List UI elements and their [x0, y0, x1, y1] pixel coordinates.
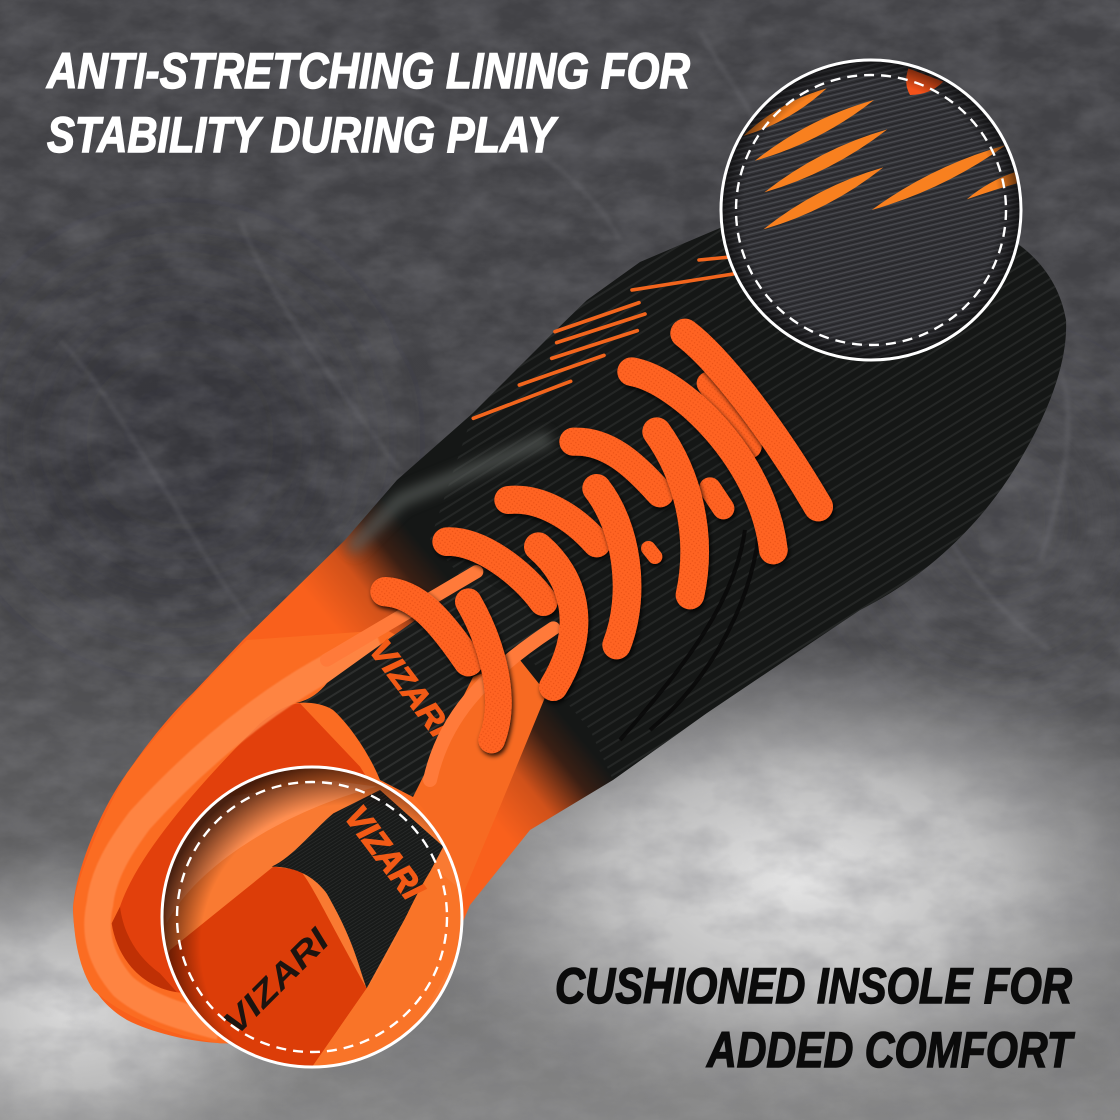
white ring — [721, 60, 1021, 360]
lace row 1 — [685, 333, 818, 507]
upper toe stripes near the callout — [632, 257, 733, 290]
toe rib texture — [430, 228, 1066, 780]
lace row 3 long strand — [657, 432, 695, 595]
shoe upper body — [73, 228, 1066, 1050]
side stitch lines — [620, 520, 760, 740]
heading: anti-stretching lining: ANTI-STRETCHING LINING FOR — [45, 43, 690, 99]
orange slashes — [743, 88, 1017, 229]
right collar band — [310, 867, 465, 1070]
mesh right of the tongue — [413, 660, 547, 893]
callout circle: insole close-up — [160, 763, 467, 1070]
tongue close-up — [272, 790, 443, 988]
collar rim highlight — [98, 643, 380, 1027]
lace row 6 cross strand — [385, 592, 468, 662]
dashed stitch ring — [736, 75, 1006, 345]
lace row 6 long strand — [468, 602, 498, 740]
tongue logo close-up: VIZARI — [337, 799, 431, 907]
shoe — [73, 228, 1066, 1050]
lace row 3 cross strand — [573, 442, 660, 493]
heading: cushioned insole — [555, 958, 1076, 1078]
dashed stitch ring — [177, 782, 447, 1052]
lace row 5 long strand — [538, 547, 574, 687]
callout circle: stretch lining close-up — [720, 58, 1022, 362]
laces — [385, 333, 818, 740]
lace row 4 long strand — [597, 488, 627, 645]
insole logo: VIZARI — [216, 921, 337, 1042]
heel shadow inside opening — [112, 907, 177, 992]
grey sheen along the side — [350, 438, 550, 550]
upper collar fill — [160, 763, 467, 1070]
heading: anti-stretching lining — [45, 43, 690, 163]
heel and collar in orange — [73, 630, 547, 1043]
lace fragments behind — [708, 383, 750, 447]
orange toe stripes — [473, 303, 645, 418]
lace row 5 cross strand — [447, 542, 543, 602]
insole seen inside the opening — [120, 703, 427, 1040]
lace row 2 — [632, 372, 773, 550]
lace tip — [906, 68, 943, 95]
tongue logo: VIZARI — [362, 633, 459, 745]
insole — [160, 867, 367, 1070]
chalk streaks — [60, 30, 1068, 650]
lace row 4 cross strand — [508, 500, 597, 543]
circle edge shade — [164, 768, 440, 1044]
eyelet rims — [327, 572, 553, 780]
collar outer — [73, 630, 480, 1043]
circle edge shade — [721, 60, 1021, 360]
heading: anti-stretching lining: STABILITY DURING PLAY — [47, 107, 559, 163]
tongue — [296, 577, 553, 797]
white ring — [162, 767, 462, 1067]
collar rim — [160, 780, 377, 923]
lining texture — [722, 62, 1020, 358]
